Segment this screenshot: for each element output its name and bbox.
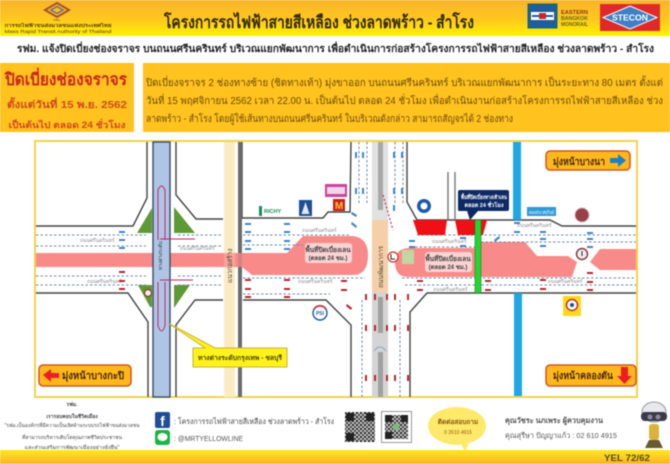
icon: STECON logo: STECON [612,14,648,22]
blue traffic markers [119,152,593,250]
callout: lane closure: พื้นที่ปิดเบี่ยงทางเท้าเลน [460,192,507,201]
closure start date: ตั้งแต่วันที่ 15 พ.ย. 2562 [7,97,128,111]
panel: closure date [0,63,134,132]
footer credo: เรารอบคอบในชีวิตเมือง [46,413,98,420]
QR code 1 [345,412,375,442]
landmark: green notice [402,250,414,264]
footer band: YEL 72/62 [604,453,650,463]
no-turn sign: west [144,290,152,296]
icon: MRTA logo [4,3,112,34]
landmark: Richy [259,206,281,216]
callout: lane closure [458,190,509,220]
icon: mascot [641,402,667,448]
expressway [153,142,195,397]
title: โครงการรถไฟฟ้าสายสีเหลือง ช่วงลาดพร้าว - สำโรง [163,12,474,32]
footer credo: "รฟม.เป็นองค์กรที่มีความเป็นเลิศด้านระบบรถไฟฟ้าขนส่งมวลชน [4,421,140,429]
closure label: east: พื้นที่ปิดเบี่ยงเลน [425,253,471,263]
closure label: east: (ตลอด 24 ชม.) [429,264,467,271]
direction label: Khlong Tan [546,365,636,386]
landmark: MG [575,208,589,222]
panel: description: วันที่ 15 พฤศจิกายน 2562 เวลา 22.00 น. เป็นต้นไป ตลอด 24 ชั่วโมง เพื่อดำเนินงานก่อสร้างโครงการรถไฟฟ้าสายสีเหลือง ช่วง [146,93,663,107]
callout: expressway [168,323,287,367]
landmark: McDonald's: M [335,201,343,212]
closure label: west [305,243,352,263]
landmark: PSI [313,306,327,320]
contact names [505,416,617,440]
landmark: PSI: PSI [316,311,325,317]
label: canal sign [527,207,556,216]
contact bubble [428,407,486,451]
canal: north [513,142,521,220]
construction strip: แนวก่อสร้าง [226,249,234,283]
pink closure zone: centre east [395,242,577,277]
Facebook page name: : โครงการรถไฟฟ้าสายสีเหลือง ช่วงลาดพร้าว - สำโรง [174,417,334,426]
footer credo [4,401,140,451]
icon: STECON logo [600,4,660,31]
contact bubble: 0 2610 4915 [444,430,472,436]
icon: Facebook [155,412,170,429]
road name labels: ถนนศรีนครินทร์ [548,278,583,285]
icon: Eastern logo: EASTERN [561,10,588,16]
pink closure zone: west [36,236,368,275]
panel: description [143,63,670,132]
road name labels: ถนนศรีนครินทร์ [517,222,552,229]
icon: MRTA logo: รฟม. [53,18,61,22]
direction label: Bang Na [546,151,630,170]
header band [0,0,670,36]
landmark: McDonald's [333,199,345,212]
road name labels: ถนนศรีนครินทร์ [298,278,333,285]
footer credo: รฟม. [67,401,78,408]
road name labels: ถนนศรีนครินทร์ [80,237,115,244]
road name labels: ถนนศรีนครินทร์ [87,278,122,285]
icon: Eastern logo: MONORAIL [561,22,589,28]
landmark: eye logo [563,296,581,316]
direction label: Khlong Tan: มุ่งหน้าคลองตัน [553,370,613,382]
road name labels [80,222,583,293]
icon: Line [155,430,170,445]
footer band [0,450,670,464]
no-turn sign: east [576,248,588,260]
QR code 2 [382,412,412,442]
contact bubble: ติดต่อสอบถาม [438,418,478,426]
no-turn sign: centre [388,252,398,262]
footer credo: และส่วนเสริมการพัฒนาเมืองอย่างยั่งยืน" [24,444,120,451]
red entry trapezoids [413,220,487,235]
callout: expressway: ทางต่างระดับกรุงเทพ - ชลบุรี [198,354,283,362]
icon: Eastern logo: BANGKOK [561,16,588,22]
expressway: ทางต่างระดับ [158,241,164,270]
pink closure zone: far east [590,249,636,270]
road name labels: ถนนศรีนครินทร์ [433,286,468,293]
Line account: : @MRTYELLOWLINE [174,436,243,443]
landmark: blue sign [299,200,312,216]
landmark: Richy: RICHY [264,209,281,215]
footer credo: ที่สามารถบริหารเติบโตคุณภาพชีวิตประชาชน [22,434,123,441]
closure label: west: พื้นที่ปิดเบี่ยงเลน [305,244,351,254]
direction label: Bang Kapi [39,365,131,386]
canal: south [514,293,522,396]
callout: lane closure: ตลอด 24 ชั่วโมง [464,201,504,209]
green islands [137,207,195,308]
direction label: Bang Na: มุ่งหน้าบางนา [553,156,605,168]
road name labels: ถนนศรีนครินทร์ [180,245,215,252]
road name labels: ถนนศรีนครินทร์ [302,227,337,234]
closure label: east [425,252,472,272]
centre road median [372,142,393,397]
icon: MRTA logo: Mass Rapid Transit Authority of Thailand [4,29,112,34]
red traffic markers [119,271,593,381]
landmark: pink sign [325,184,347,197]
construction strip [224,142,242,397]
panel: description: ลาดพร้าว - สำโรง โดยผู้ใช้เส้นทางบนถนนศรีนครินทร์ ในบริเวณดังกล่าว สามารถสัญจรได้ 2 ช่องทาง [146,112,513,125]
closure heading: ปิดเบี่ยงช่องจราจร [4,67,127,89]
landmark: bank [417,199,431,213]
label: canal sign: คลองประเวศบุรีรมย์ [529,209,554,216]
road name labels: ถนนศรีนครินทร์ [432,238,467,245]
direction label: Bang Kapi: มุ่งหน้าบางกะปิ [62,370,124,382]
icon: Facebook: f [160,413,165,429]
centre road median: ถนนพัฒนาการ [377,245,385,288]
side soi lines [448,172,455,220]
closure duration: เป็นต้นไป ตลอด 24 ชั่วโมง [8,118,125,130]
lane markings [36,142,636,397]
icon: MRTA logo: การรถไฟฟ้าขนส่งมวลชนแห่งประเทศไทย [4,22,112,28]
road kerbs [36,142,636,397]
contact names: คุณสุรีษา ปัญญาแก้ว : 02 610 4915 [505,431,617,440]
contact names: คุณวัชระ นภเพระ ผู้ควบคุมงาน [505,416,604,426]
icon: Eastern logo [528,4,589,28]
panel: description: ปิดเบี่ยงจราจร 2 ช่องทางซ้าย (ชิดทางเท้า) มุ่งขาออก บนถนนศรีนครินทร์ บริเวณแยกพัฒนาการ เป็นระยะทาง 80 เมตร ตั้งแต่ [145,75,663,89]
green construction bar [475,220,481,293]
subheading: รฟม. แจ้งปิดเบี่ยงช่องจราจร บนถนนศรีนครินทร์ บริเวณแยกพัฒนาการ เพื่อดำเนินการก่อสร้างโครงการรถไฟฟ้าสายสีเหลือง ช่วงลาดพร้าว - สำโรง [17,41,654,55]
closure label: west: (ตลอด 24 ชม.) [309,255,347,262]
panel: road diagram [35,141,637,397]
